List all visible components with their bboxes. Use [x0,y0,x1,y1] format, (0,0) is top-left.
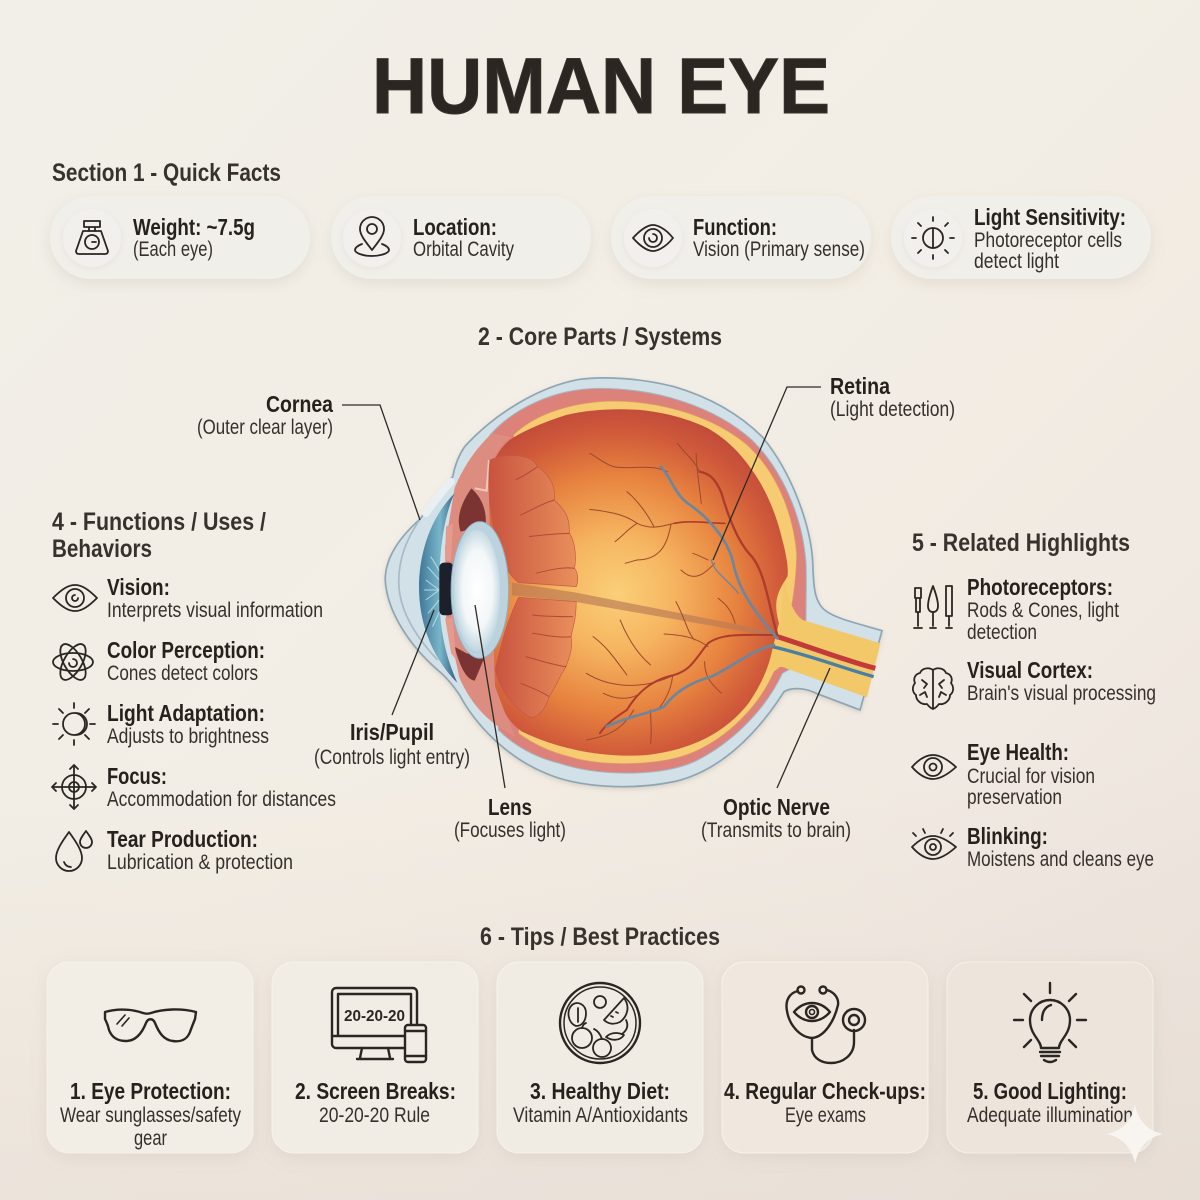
heading: functions: 4 - Functions / Uses / [52,508,266,536]
iris and pupil [419,493,457,683]
card: eye protection: Wear sunglasses/safety [60,1104,241,1127]
icon: brain [913,668,953,709]
item: eye health: Eye Health: [967,739,1069,765]
item: visual cortex [913,657,1156,709]
card: eye protection: gear [134,1127,167,1150]
eye anatomy diagram [385,378,882,787]
heading: tips: 6 - Tips / Best Practices [480,923,720,951]
card: location [331,196,591,279]
label: retina: Retina [830,373,890,399]
heading: related highlights: 5 - Related Highlights [912,529,1130,557]
panel: quick facts [50,159,1151,279]
label: retina [713,373,955,560]
panel: related highlights [912,529,1156,871]
item: photoreceptors: Rods & Cones, light [967,599,1119,622]
card: regular check-ups: Eye exams [785,1104,866,1127]
optic nerve [769,573,880,697]
lens [451,522,509,658]
icon: atom [53,640,93,684]
item: eye health: preservation [967,786,1062,809]
card: healthy diet: 3. Healthy Diet: [530,1078,670,1104]
icon: light sensor [912,217,954,259]
card: location: Location: [413,214,497,240]
icon: monitor and phone: 20-20-20 [344,1008,405,1025]
item: focus: Focus: [107,763,167,789]
item: vision: Interprets visual information [107,599,323,622]
card: regular check-ups: 4. Regular Check-ups: [724,1078,926,1104]
icon: light bulb [1014,983,1086,1062]
item: light adaptation: Light Adaptation: [107,700,265,726]
anterior pink tissue [445,433,515,737]
item: blinking: Blinking: [967,823,1048,849]
item: focus [52,763,336,811]
label: cornea: (Outer clear layer) [197,416,333,439]
icon: tear drops [56,831,92,871]
retina layer [514,401,797,764]
icon: map pin [355,217,389,256]
card: good lighting [947,962,1153,1153]
label: lens: (Focuses light) [454,819,566,842]
icon: scale [76,221,108,254]
card: function: Vision (Primary sense) [693,238,865,261]
item: eye health: Crucial for vision [967,765,1095,788]
item: light adaptation: Adjusts to brightness [107,725,269,748]
heading: core parts: 2 - Core Parts / Systems [478,323,722,351]
label: lens [454,605,566,842]
icon: sunglasses [105,1009,196,1041]
card: good lighting: Adequate illumination [967,1104,1133,1127]
icon: crosshair [52,765,96,809]
ciliary muscle [489,456,578,717]
card: regular check-ups [722,962,928,1153]
vitreous chamber [488,409,788,756]
heading: quick facts: Section 1 - Quick Facts [52,159,281,187]
item: vision [53,574,323,622]
item: visual cortex: Visual Cortex: [967,657,1093,683]
card: function: Function: [693,214,777,240]
card: light sensitivity: Light Sensitivity: [974,204,1126,230]
panel: functions [52,508,336,874]
item: blinking [912,823,1154,871]
label: cornea: Cornea [266,391,333,417]
card: screen breaks: 20-20-20 Rule [319,1104,430,1127]
icon: eye [53,585,97,611]
card: light sensitivity: detect light [974,250,1059,273]
label: iris and pupil [314,610,470,769]
item: color perception: Cones detect colors [107,662,258,685]
label: optic nerve: (Transmits to brain) [701,819,851,842]
panel: tips [47,923,1153,1153]
title: HUMAN EYE [372,41,830,130]
item: tear production: Tear Production: [107,826,258,852]
choroid layer [490,388,806,773]
card: light sensitivity: Photoreceptor cells [974,229,1122,252]
label: iris and pupil: (Controls light entry) [314,746,470,769]
label: cornea [197,391,420,520]
item: photoreceptors: Photoreceptors: [967,574,1113,600]
label: retina: (Light detection) [830,398,955,421]
item: color perception: Color Perception: [107,637,265,663]
card: healthy diet [497,962,703,1153]
item: vision: Vision: [107,574,170,600]
item: tear production [56,826,293,874]
retinal vessels [586,443,777,743]
item: photoreceptors: detection [967,621,1037,644]
item: visual cortex: Brain's visual processing [967,682,1156,705]
label: optic nerve [701,668,851,842]
card: location: Orbital Cavity [413,238,514,261]
icon: sun [53,703,95,745]
icon: sparkle watermark [1107,1105,1163,1163]
item: tear production: Lubrication & protection [107,851,293,874]
item: color perception [53,637,265,685]
icon: monitor and phone [332,988,426,1062]
visual axis [512,583,774,637]
item: photoreceptors [914,574,1119,644]
label: lens: Lens [488,794,532,820]
icon: stethoscope with eye [786,986,865,1063]
card: weight [50,196,310,279]
item: blinking: Moistens and cleans eye [967,848,1154,871]
item: focus: Accommodation for distances [107,788,336,811]
card: screen breaks: 2. Screen Breaks: [295,1078,456,1104]
icon: eye [633,225,673,251]
panel: functions: Behaviors [52,535,152,563]
card: eye protection [47,962,253,1153]
card: weight: (Each eye) [133,238,213,261]
card: function [611,196,871,279]
icon: plate of food [560,983,640,1063]
sclera [385,378,882,787]
card: weight: Weight: ~7.5g [133,214,255,240]
icon: eye [912,755,956,779]
icon: rods and cones [914,586,952,628]
card: good lighting: 5. Good Lighting: [973,1078,1127,1104]
item: eye health [912,739,1095,809]
icon: eye with lashes [912,829,956,859]
card: light sensitivity [891,196,1151,279]
card: screen breaks [272,962,478,1153]
label: optic nerve: Optic Nerve [723,794,830,820]
card: healthy diet: Vitamin A/Antioxidants [513,1104,688,1127]
item: light adaptation [53,700,269,748]
card: eye protection: 1. Eye Protection: [70,1078,231,1104]
label: iris and pupil: Iris/Pupil [350,719,434,745]
